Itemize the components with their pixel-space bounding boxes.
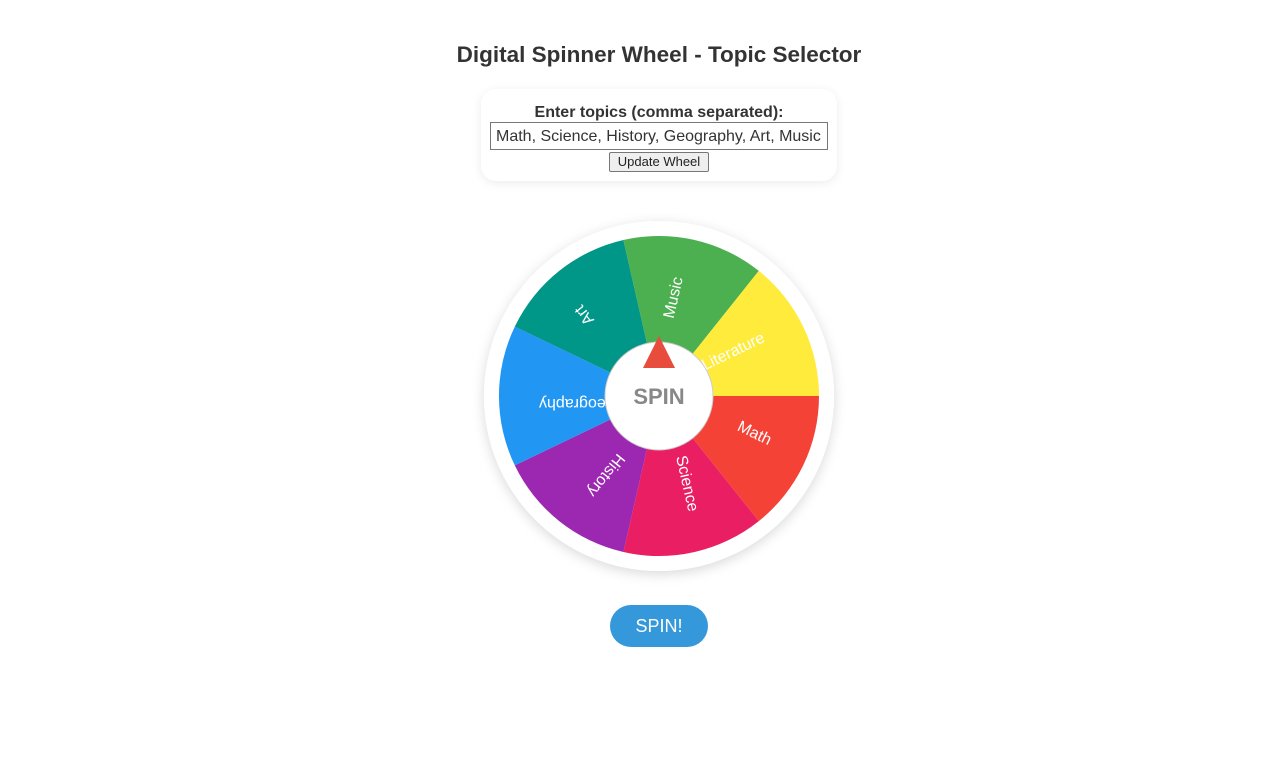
spin button: [610, 605, 708, 647]
segment labels: History: [583, 450, 628, 500]
spin button: SPIN!: [635, 616, 682, 636]
update button: [609, 152, 709, 172]
input label: Enter topics (comma separated):: [535, 104, 783, 121]
segment labels: Science: [672, 454, 701, 513]
segment labels: Math: [735, 418, 774, 449]
panel: topic input card: [481, 89, 837, 181]
text input: Math, Science, History, Geography, Art, Music: [496, 128, 821, 145]
center spin button: SPIN: [633, 384, 685, 409]
segment labels: [539, 275, 774, 513]
segment labels: Music: [661, 275, 687, 320]
wheel outer ring: [484, 221, 834, 571]
update button: Update Wheel: [618, 154, 700, 169]
title: Digital Spinner Wheel - Topic Selector: [457, 42, 861, 67]
pointer arrow: [643, 336, 675, 368]
segment labels: Art: [571, 301, 598, 328]
wheel segments: [499, 236, 819, 556]
segment labels: Geography: [539, 395, 618, 412]
text input: [490, 122, 828, 150]
segment labels: Literature: [699, 329, 768, 374]
center spin button: [605, 342, 713, 450]
